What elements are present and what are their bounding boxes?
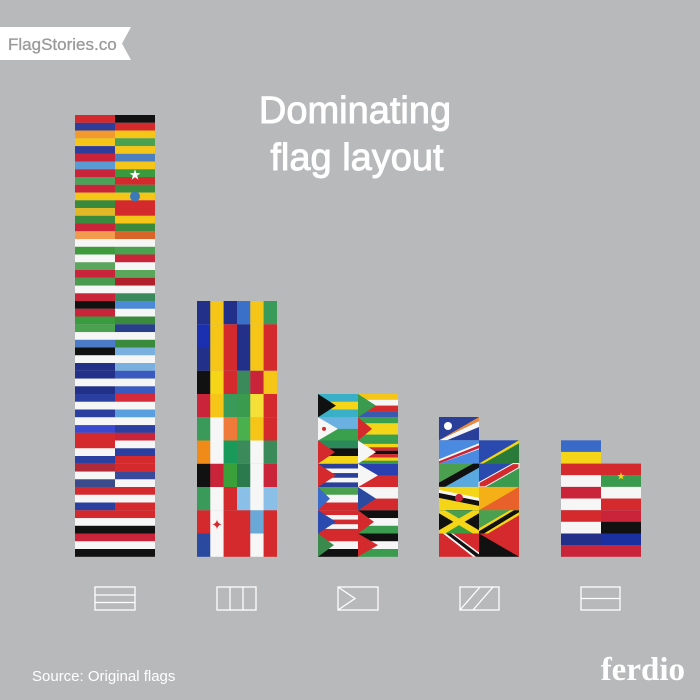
column: other horizontal (two-stripe) flags	[561, 440, 641, 557]
column: other horizontal (two-stripe) flags: ★	[617, 472, 626, 483]
title: flag layout	[270, 137, 444, 179]
icon: two-stripe layout	[581, 587, 620, 610]
column: vertical stripe flags: ✦	[211, 516, 223, 532]
icon: horizontal layout	[95, 587, 135, 610]
logo: ferdio: ferdio	[601, 652, 685, 688]
brand tag: FlagStories.co	[0, 27, 131, 60]
column: horizontal stripe flags: ★	[129, 166, 141, 182]
column: triangle flags	[318, 394, 398, 557]
icon: triangle layout	[338, 587, 378, 610]
column: horizontal stripe flags	[75, 115, 155, 557]
source note: Source: Original flags	[32, 668, 175, 685]
title: Dominating	[259, 90, 451, 132]
column: diagonal flags	[439, 417, 519, 557]
column: vertical stripe flags	[197, 301, 277, 557]
icon: vertical layout	[217, 587, 256, 610]
brand tag: FlagStories.co: FlagStories.co	[8, 35, 117, 54]
icon: diagonal layout	[460, 587, 499, 610]
title	[259, 90, 451, 179]
